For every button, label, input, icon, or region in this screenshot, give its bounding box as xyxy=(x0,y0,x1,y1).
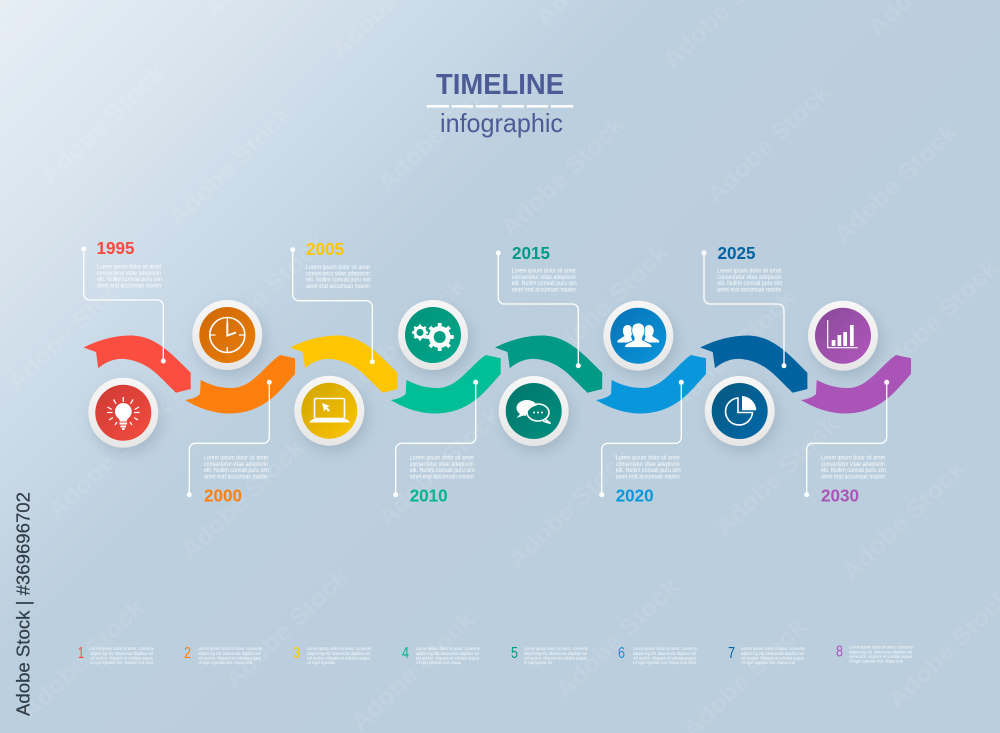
watermark pattern: Adobe Stock xyxy=(3,266,137,397)
year block: 2010: amet erat accumsan maxim xyxy=(410,474,474,480)
circle icon: bar chart xyxy=(808,301,882,377)
leader line: 2010 xyxy=(393,380,478,497)
note 7 xyxy=(728,645,805,665)
note 4: adipiscing elit. Maecenas dapibus vel xyxy=(416,651,479,656)
year block: 1995: Lorem ipsum dolor sit amet xyxy=(97,264,161,270)
note 2: adipiscing elit. Maecenas dapibus vel xyxy=(198,651,261,656)
note 4: Ut eget egestas nisl. Aliqua xyxy=(416,660,461,665)
note 7: 7 xyxy=(728,645,735,662)
note 2: 2 xyxy=(184,645,191,662)
note 6 xyxy=(618,645,697,665)
note 2: Lorem ipsum dolor sit amet, consecte xyxy=(198,646,262,651)
note 3: Ut eget egestas xyxy=(307,660,336,665)
note 1: adipiscing elit. Maecenas dapibus vel xyxy=(90,651,153,656)
year block: 2000: consectetur vitae adepiscin xyxy=(204,461,268,468)
year block: 2025: Lorem ipsum dolor sit amet xyxy=(717,268,782,274)
note 8: vel auctor. Aliquam et volutpa augue. xyxy=(849,654,913,659)
note 8 xyxy=(836,644,913,664)
note 2: Ut eget egestas nisl. Aliqua erat xyxy=(198,660,253,665)
year block: 2015: 2015 xyxy=(512,243,550,263)
note 3: adipiscing elit. Maecenas dapibus vel xyxy=(307,651,370,656)
note 3: 3 xyxy=(293,645,300,662)
title: TIMELINE xyxy=(436,69,564,101)
year block: 1995 xyxy=(96,238,162,290)
year block: 2010: consectetur vitae adepiscin xyxy=(410,461,474,468)
year block: 2020: 2020 xyxy=(616,486,654,506)
year block: 2015 xyxy=(512,243,577,294)
note 1: 1 xyxy=(78,645,84,662)
note 8: adipiscing elit. Maecenas dapibus vel xyxy=(849,649,912,654)
circle icon: gears xyxy=(398,300,472,376)
note 1 xyxy=(78,645,154,665)
watermark pattern: Adobe Stock xyxy=(36,59,170,190)
year block: 2005: amet erat accumsan maxim xyxy=(306,283,370,290)
watermark pattern: Adobe Stock xyxy=(702,78,836,209)
side credit text: Adobe Stock | #369696702 xyxy=(14,492,34,716)
note 1: vel auctor. Aliquam et volutpa augue. xyxy=(90,656,154,660)
watermark pattern: Adobe Stock xyxy=(503,443,637,574)
note 4 xyxy=(402,645,480,665)
circle icon: laptop xyxy=(294,376,368,452)
year block: 2005: Lorem ipsum dolor sit amet xyxy=(306,264,370,271)
watermark pattern: Adobe Stock xyxy=(337,272,471,403)
note 2: vel auctor. Aliquam et volutpa augue. xyxy=(198,656,262,660)
watermark pattern: Adobe Stock xyxy=(220,563,354,694)
note 4: vel auctor. Aliquam et volutpa augue. xyxy=(416,656,480,660)
leader line: 2015 xyxy=(496,250,581,368)
note 8: Ut eget egestas nisl. Aliqua erat xyxy=(849,658,904,664)
leader line: 1995 xyxy=(81,246,166,364)
note 7: Ut eget egestas nisl. Aliqua erat xyxy=(741,660,796,665)
year block: 2015: consectetur vitae adepiscin xyxy=(512,274,576,281)
leader line: 2020 xyxy=(599,380,684,497)
year block: 2000: Lorem ipsum dolor sit amet xyxy=(204,454,268,462)
year block: 2005: 2005 xyxy=(306,239,344,259)
note 3: Lorem ipsum dolor sit amet, consecte xyxy=(307,646,371,651)
year block: 2020: Lorem ipsum dolor sit amet xyxy=(616,454,680,462)
note 7: Lorem ipsum dolor sit amet, consecte xyxy=(741,646,805,651)
year block: 2025: elit. Nullim convali puru sim xyxy=(717,280,782,287)
circle icon: light bulb xyxy=(88,378,162,454)
circle icon: pie chart xyxy=(705,376,778,452)
year block: 2005 xyxy=(306,239,371,290)
year block: 1995: consectetur vitae adepiscin xyxy=(97,270,161,277)
note 6: adipiscing elit. Maecenas dapibus vel xyxy=(633,651,696,656)
watermark pattern: Adobe Stock xyxy=(829,118,963,249)
year block: 2015: Lorem ipsum dolor sit amet xyxy=(512,268,576,274)
note 5: vel auctor. Aliquam et volutpa augue. xyxy=(524,656,588,660)
note 4: 4 xyxy=(402,645,409,662)
watermark pattern: Adobe Stock xyxy=(197,229,331,360)
note 1: Ut eget egestas nisl. Aliquam erat volut. xyxy=(90,660,154,665)
watermark pattern: Adobe Stock xyxy=(43,394,177,525)
ribbon: 2000 orange xyxy=(185,355,295,414)
watermark pattern: Adobe Stock xyxy=(837,455,971,586)
note 5 xyxy=(511,645,588,665)
circle icon: chat bubbles xyxy=(499,376,572,452)
watermark pattern: Adobe Stock xyxy=(710,411,844,542)
note 6: 6 xyxy=(618,645,625,662)
year block: 2020: elit. Nullim convali puru sim xyxy=(616,467,681,474)
title xyxy=(427,69,573,138)
ribbon: 2020 blue xyxy=(596,355,706,414)
note 6: Ut eget egestas nisl. Aliqua erat volut. xyxy=(633,660,697,665)
year block: 2030: amet erat accumsan maxim xyxy=(821,474,885,480)
note 2 xyxy=(184,645,262,665)
note 3 xyxy=(293,645,371,665)
note 8: 8 xyxy=(836,644,843,660)
year block: 2025: amet erat accumsan maxim xyxy=(717,286,781,294)
note 6: Lorem ipsum dolor sit amet, consecte xyxy=(633,646,697,651)
watermark pattern: Adobe Stock xyxy=(16,594,150,725)
year block: 2000: amet erat accumsan maxim xyxy=(204,474,268,480)
note 6: vel auctor. Aliquam et volutpa augue. xyxy=(633,656,697,660)
note 5: Ut eget egestas nis xyxy=(524,660,553,665)
ribbon: 2015 teal xyxy=(495,335,602,393)
year block: 2010: 2010 xyxy=(410,486,448,506)
leader line: 2005 xyxy=(290,247,375,364)
year block: 2030: consectetur vitae adepiscin xyxy=(821,461,885,468)
watermark pattern: Adobe Stock xyxy=(551,573,685,704)
ribbon: 2005 yellow xyxy=(290,335,397,393)
year block: 2000: elit. Nullim convali puru sim xyxy=(204,467,269,474)
leader line: 2000 xyxy=(187,380,272,497)
note 7: adipiscing elit. Maecenas dapibus vel xyxy=(741,651,804,656)
year block: 2000 xyxy=(204,454,269,506)
watermark pattern: Adobe Stock xyxy=(540,239,674,370)
watermark pattern: Adobe Stock xyxy=(373,401,507,532)
title: infographic xyxy=(440,108,563,138)
year block: 2015: amet erat accumsan maxim xyxy=(512,286,576,294)
year block: 2030: elit. Nullim convali puru sim xyxy=(821,467,886,474)
watermark pattern: Adobe Stock xyxy=(373,66,507,197)
note 4: Lorem ipsum dolor sit amet, consecte xyxy=(416,646,480,651)
circle icon: people xyxy=(603,301,677,377)
circle icon: clock xyxy=(192,300,266,376)
note 7: vel auctor. Aliquam et volutpa augue. xyxy=(741,656,805,660)
note 3: vel auctor. Aliquam et volutpa augue. xyxy=(307,656,371,660)
year block: 2010: elit. Nullim convali puru sim xyxy=(410,467,475,474)
watermark pattern: Adobe Stock xyxy=(164,101,298,232)
year block: 2010 xyxy=(410,454,475,506)
year block: 2025 xyxy=(717,243,782,294)
ribbon: 2025 navy xyxy=(700,335,807,393)
year block: 1995: elit. Nullim convali puru sim xyxy=(97,276,162,283)
year block: 2030: Lorem ipsum dolor sit amet xyxy=(821,454,885,462)
note 5: adipiscing elit. Maecenas dapibus vel xyxy=(524,651,587,656)
note 5: Lorem ipsum dolor sit amet, consecte xyxy=(524,646,588,651)
year block: 1995: 1995 xyxy=(96,238,135,258)
leader line: 2030 xyxy=(804,380,889,497)
ribbon: 1995 red xyxy=(84,335,191,393)
year block: 2010: Lorem ipsum dolor sit amet xyxy=(410,454,474,462)
leader line: 2025 xyxy=(702,250,786,368)
watermark pattern: Adobe Stock xyxy=(496,111,630,242)
watermark pattern: Adobe Stock xyxy=(176,434,310,565)
year block: 1995: amet erat accumsan maxim xyxy=(97,282,161,290)
note 1: Lorem ipsum dolor sit amet, consecte xyxy=(90,646,154,651)
note 8: Lorem ipsum dolor sit amet, consecte xyxy=(849,644,913,650)
year block: 2005: elit. Nullim convali puru sim xyxy=(306,276,371,284)
year block: 2005: consectetur vitae adepiscin xyxy=(306,270,370,278)
year block: 2020: amet erat accumsan maxim xyxy=(616,474,680,480)
watermark pattern: Adobe Stock xyxy=(667,285,801,416)
watermark pattern: Adobe Stock xyxy=(870,254,1000,385)
year block: 2030: 2030 xyxy=(821,486,859,506)
ribbon: 2030 purple xyxy=(801,355,911,414)
year block: 2030 xyxy=(821,454,886,506)
year block: 2015: elit. Nullim convali puru sim xyxy=(512,280,577,287)
note 5: 5 xyxy=(511,645,518,662)
ribbon: 2010 green xyxy=(391,355,501,414)
year block: 2020 xyxy=(616,454,681,506)
year block: 2025: consectetur vitae adepiscin xyxy=(717,274,781,281)
year block: 2000: 2000 xyxy=(204,486,242,506)
year block: 2020: consectetur vitae adepiscin xyxy=(616,461,680,468)
year block: 2025: 2025 xyxy=(718,243,756,263)
